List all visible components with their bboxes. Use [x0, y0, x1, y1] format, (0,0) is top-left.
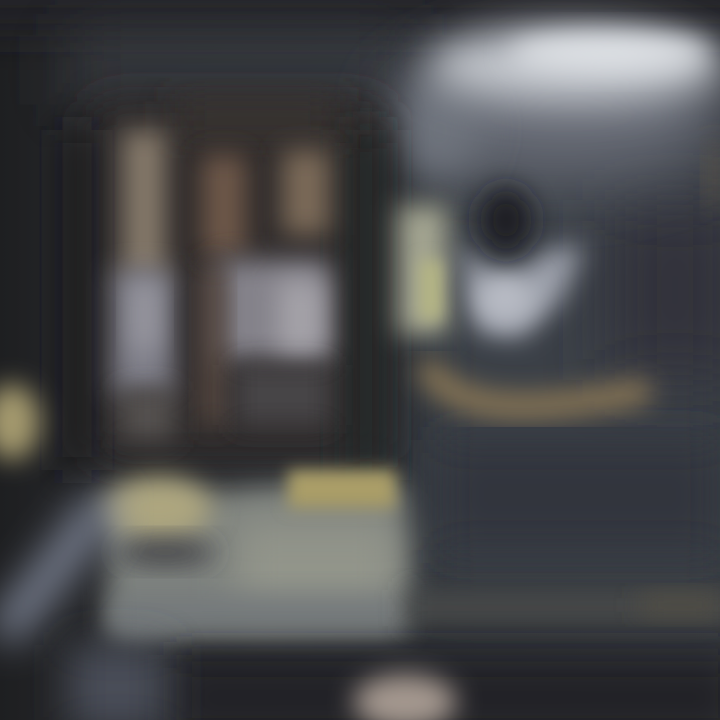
bright ceiling light: [390, 28, 720, 185]
orange curved stroke: [430, 372, 640, 406]
yellow-white vertical glow: [398, 205, 448, 335]
dark window frame: [60, 100, 387, 480]
yellow disc at left edge: [0, 384, 40, 460]
dark foreground floor: [170, 655, 720, 720]
yellow block on table: [288, 470, 396, 508]
white chevron shape: [458, 240, 585, 338]
lower left blue-grey blur: [70, 645, 165, 720]
pale round object at bottom: [353, 674, 457, 720]
diagonal pale streak: [10, 510, 100, 625]
lower right counter band: [405, 590, 720, 626]
right edge warm accent: [708, 145, 720, 205]
top dark band: [0, 0, 720, 30]
right dark panel: [420, 170, 720, 590]
left window pane: [112, 130, 175, 440]
upper wall haze: [70, 35, 410, 105]
table surface: [105, 485, 405, 640]
centre window pane: [202, 150, 330, 425]
cream bowl: [104, 476, 215, 564]
dark circle: [480, 188, 532, 252]
